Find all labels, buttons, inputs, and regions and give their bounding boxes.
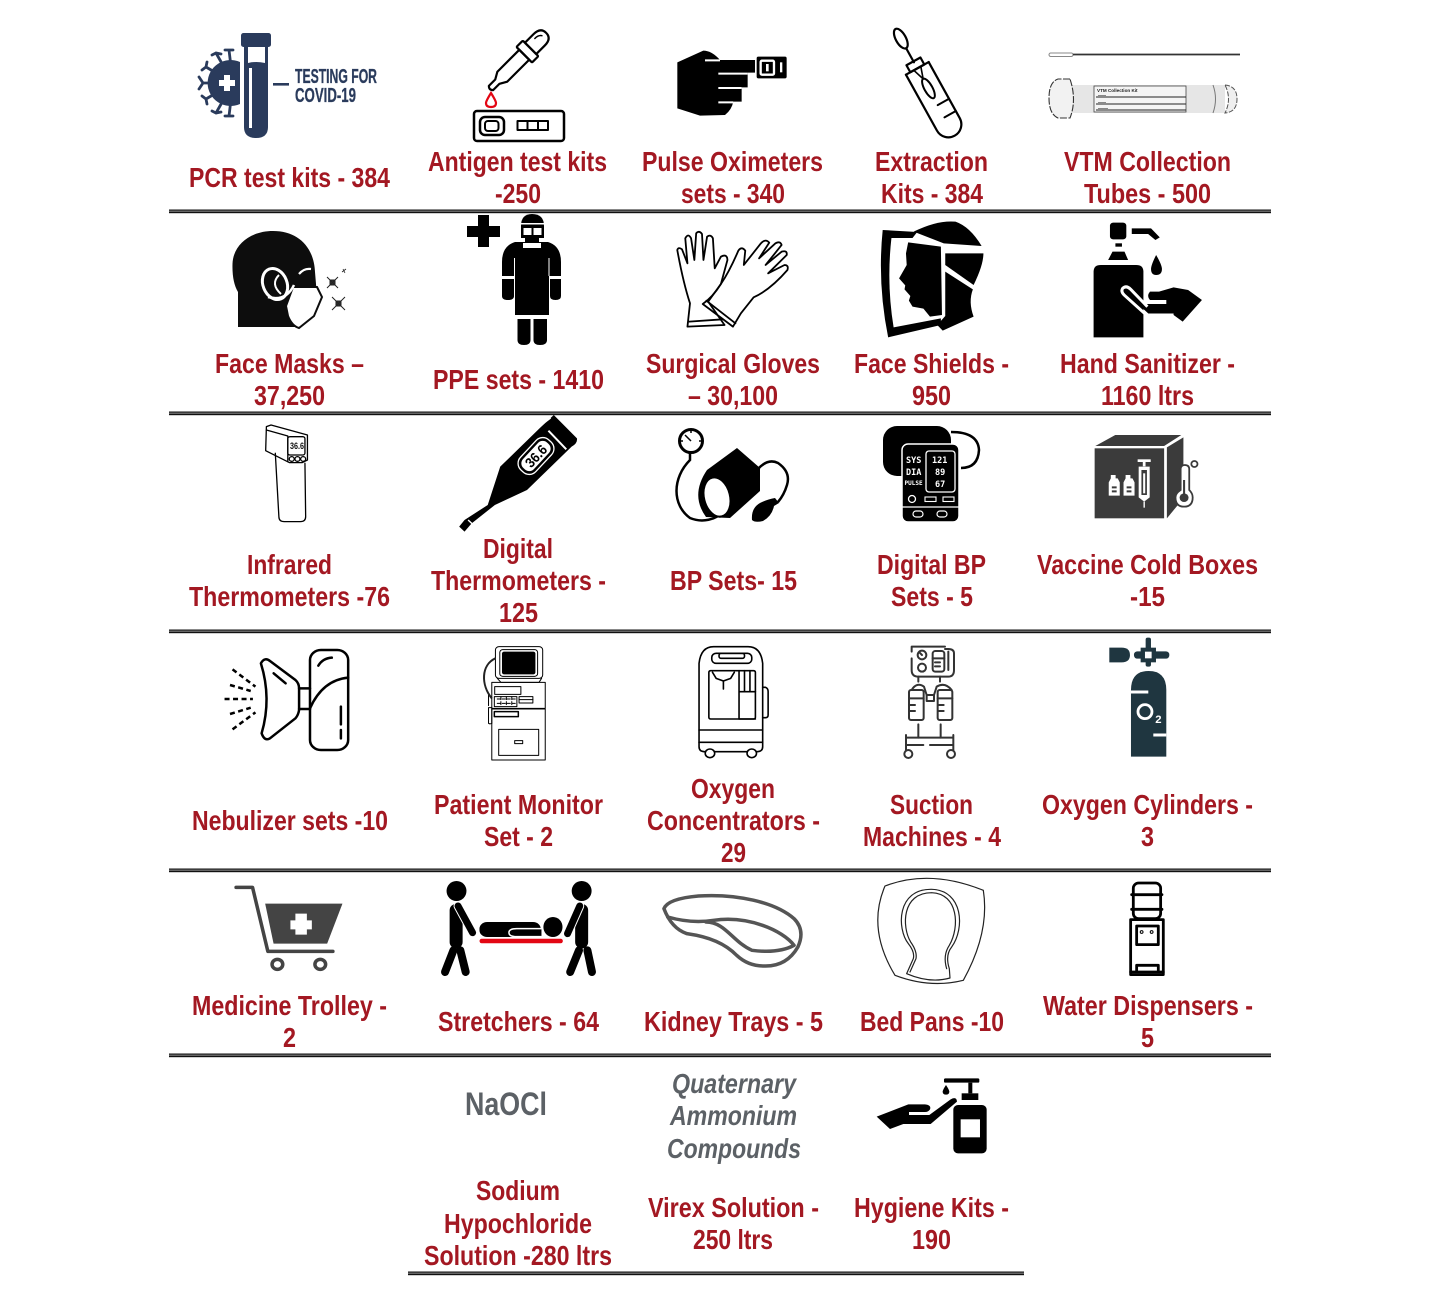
- label: Medicine Trolley: 2: [283, 1022, 296, 1053]
- label: Digital Thermometers: Digital: [483, 533, 553, 564]
- icon: digital BP monitor: DIA: [906, 468, 921, 478]
- icon: dropper and antigen cassette: [474, 25, 564, 141]
- label: Antigen test kits: [428, 146, 607, 209]
- label: Digital BP Sets: [877, 549, 986, 612]
- icon: VTM tube and swab: [1049, 53, 1240, 118]
- item: Oxygen Concentrators: [647, 647, 820, 868]
- icon: digital BP monitor: [883, 426, 979, 522]
- label: Oxygen Cylinders: Oxygen Cylinders -: [1042, 789, 1253, 820]
- label: Virex Solution: Virex Solution -: [648, 1192, 819, 1223]
- item: Oxygen Cylinders: [1042, 638, 1253, 852]
- item: Bed Pans: [860, 878, 1004, 1037]
- label: Pulse Oximeters: Pulse Oximeters: [642, 146, 823, 177]
- icon: kidney tray: [664, 896, 801, 966]
- label: Hand Sanitizer: 1160 ltrs: [1101, 380, 1194, 411]
- label: Oxygen Concentrators: [647, 773, 820, 868]
- label: Medicine Trolley: Medicine Trolley -: [192, 990, 387, 1021]
- label: PPE sets: PPE sets - 1410: [433, 364, 604, 395]
- label: Infrared Thermometers: Infrared: [247, 549, 332, 580]
- label: Patient Monitor Set: Set - 2: [484, 821, 553, 852]
- icon: swab in tube: [884, 23, 966, 142]
- label: Digital BP Sets: Digital BP: [877, 549, 986, 580]
- label: Kidney Trays: Kidney Trays - 5: [644, 1006, 823, 1037]
- label: Sodium Hypochloride Solution: [424, 1175, 612, 1271]
- item: PCR test kits: [189, 33, 391, 193]
- item: Face Masks: [215, 231, 364, 411]
- item: Pulse Oximeters: [642, 51, 823, 209]
- item: Nebulizer sets: [192, 650, 388, 836]
- icon: Quaternary Ammonium Compounds text: Quaternary: [672, 1068, 797, 1099]
- icon: finger in pulse oximeter: [677, 51, 787, 116]
- label: Suction Machines: Suction: [890, 789, 973, 820]
- label: Virex Solution: [648, 1192, 819, 1255]
- icon: PCR test tube and virus: COVID-19: [295, 85, 356, 107]
- label: Suction Machines: [863, 789, 1002, 852]
- icon: digital BP monitor: 89: [935, 468, 945, 478]
- label: Infrared Thermometers: [189, 549, 390, 612]
- icon: digital BP monitor: SYS: [906, 456, 921, 466]
- label: Patient Monitor Set: [434, 789, 603, 852]
- item: Sodium Hypochloride Solution: [424, 1086, 612, 1271]
- label: Patient Monitor Set: Patient Monitor: [434, 789, 603, 820]
- item: Antigen test kits: [428, 25, 607, 209]
- icon: suction machine: [904, 647, 955, 758]
- item: Face Shields: [854, 221, 1009, 411]
- icon: person in PPE with plus: [467, 214, 561, 345]
- label: Water Dispensers: 5: [1141, 1022, 1154, 1053]
- label: Face Shields: 950: [912, 380, 951, 411]
- icon: head with face mask: [232, 231, 346, 328]
- icon: stretcher carriers: [445, 881, 592, 972]
- item: Suction Machines: [863, 647, 1002, 852]
- label: Hygiene Kits: Hygiene Kits -: [854, 1192, 1009, 1223]
- item: PPE sets: [433, 214, 604, 395]
- icon: Quaternary Ammonium Compounds text: Compounds: [667, 1133, 801, 1164]
- label: Antigen test kits: -250: [495, 178, 541, 209]
- label: Surgical Gloves: [646, 348, 820, 411]
- label: Digital BP Sets: Sets - 5: [891, 581, 973, 612]
- label: Oxygen Concentrators: Concentrators -: [647, 805, 820, 836]
- label: Face Masks: 37,250: [254, 380, 325, 411]
- label: Stretchers: Stretchers - 64: [438, 1006, 600, 1037]
- item: Hygiene Kits: [854, 1078, 1009, 1255]
- icon: hand under soap dispenser: [877, 1078, 987, 1153]
- icon: PCR test tube and virus: TESTING FOR: [295, 66, 377, 88]
- item: Vaccine Cold Boxes: [1037, 435, 1258, 612]
- label: Water Dispensers: [1043, 990, 1253, 1053]
- label: Oxygen Cylinders: [1042, 789, 1253, 852]
- label: Sodium Hypochloride Solution: Sodium: [476, 1175, 560, 1206]
- icon: digital BP monitor: 121: [932, 456, 947, 466]
- item: Water Dispensers: [1043, 883, 1253, 1053]
- label: Vaccine Cold Boxes: Vaccine Cold Boxes: [1037, 549, 1258, 580]
- label: Hand Sanitizer: [1060, 348, 1235, 411]
- label: Extraction Kits: Extraction: [875, 146, 988, 177]
- label: Virex Solution: 250 ltrs: [693, 1224, 773, 1255]
- icon: oxygen cylinder: 2: [1155, 714, 1162, 726]
- label: Water Dispensers: Water Dispensers -: [1043, 990, 1253, 1021]
- icon: digital BP monitor: 67: [935, 480, 945, 490]
- label: Hand Sanitizer: Hand Sanitizer -: [1060, 348, 1235, 379]
- label: Pulse Oximeters: sets - 340: [681, 178, 785, 209]
- item: Extraction Kits: [875, 23, 988, 209]
- icon: water dispenser: [1131, 883, 1163, 975]
- icon: infrared thermometer gun: 36.6: [290, 441, 304, 451]
- label: Oxygen Cylinders: 3: [1141, 821, 1154, 852]
- label: Surgical Gloves: – 30,100: [688, 380, 778, 411]
- icon: NaOCl formula: NaOCl: [465, 1086, 547, 1122]
- label: Infrared Thermometers: Thermometers -76: [189, 581, 390, 612]
- label: Sodium Hypochloride Solution: Solution -280 ltrs: [424, 1240, 612, 1271]
- icon: medicine trolley: [236, 887, 342, 969]
- icon: bed pan: [878, 878, 985, 984]
- label: Vaccine Cold Boxes: [1037, 549, 1258, 612]
- icon: oxygen concentrator: [699, 647, 768, 758]
- label: Hygiene Kits: 190: [912, 1224, 951, 1255]
- label: Face Shields: Face Shields -: [854, 348, 1009, 379]
- label: Digital Thermometers: [431, 533, 606, 628]
- label: Hygiene Kits: [854, 1192, 1009, 1255]
- icon: Quaternary Ammonium Compounds text: [667, 1068, 801, 1164]
- label: Sodium Hypochloride Solution: Hypochloride: [444, 1208, 592, 1239]
- icon: pair of gloves: [677, 232, 788, 327]
- item: Infrared Thermometers: [189, 425, 390, 612]
- label: Pulse Oximeters: [642, 146, 823, 209]
- icon: digital thermometer: 36.6: [522, 441, 551, 471]
- item: VTM Collection Tubes: [1049, 53, 1240, 209]
- label: BP Sets: BP Sets- 15: [670, 565, 797, 596]
- label: Nebulizer sets: Nebulizer sets -10: [192, 805, 388, 836]
- label: Extraction Kits: Kits - 384: [881, 178, 984, 209]
- label: Medicine Trolley: [192, 990, 387, 1053]
- icon: patient monitor: [484, 647, 545, 760]
- icon: VTM tube and swab: VTM Collection Kit: [1097, 88, 1138, 93]
- label: Bed Pans: Bed Pans -10: [860, 1006, 1004, 1037]
- label: VTM Collection Tubes: Tubes - 500: [1084, 178, 1211, 209]
- item: Digital Thermometers: [431, 415, 606, 628]
- label: Suction Machines: Machines - 4: [863, 821, 1002, 852]
- label: Face Masks: [215, 348, 364, 411]
- icon: Quaternary Ammonium Compounds text: Ammonium: [669, 1100, 797, 1131]
- label: Oxygen Concentrators: Oxygen: [691, 773, 775, 804]
- item: Stretchers: [438, 881, 600, 1037]
- icon: sanitizer bottle and hand: [1094, 223, 1202, 337]
- label: Face Shields: [854, 348, 1009, 411]
- label: PCR test kits: PCR test kits - 384: [189, 162, 391, 193]
- icon: digital thermometer: [459, 415, 577, 532]
- item: Kidney Trays: [644, 896, 823, 1037]
- item: Hand Sanitizer: [1060, 223, 1235, 411]
- item: Surgical Gloves: [646, 232, 820, 411]
- item: Virex Solution: [648, 1068, 819, 1255]
- label: VTM Collection Tubes: [1064, 146, 1231, 209]
- icon: infrared thermometer gun: [266, 425, 307, 522]
- item: Medicine Trolley: [192, 887, 387, 1053]
- label: Surgical Gloves: Surgical Gloves: [646, 348, 820, 379]
- label: Digital Thermometers: 125: [499, 597, 538, 628]
- item: Digital BP Sets: [877, 426, 986, 612]
- label: Oxygen Concentrators: 29: [721, 837, 746, 868]
- icon: face shield: [881, 221, 983, 337]
- icon: sphygmomanometer: [676, 430, 788, 522]
- icon: nebulizer mask: [225, 650, 348, 750]
- label: Digital Thermometers: Thermometers -: [431, 565, 606, 596]
- item: BP Sets: [670, 430, 797, 596]
- label: Extraction Kits: [875, 146, 988, 209]
- item: Patient Monitor Set: [434, 647, 603, 852]
- icon: digital BP monitor: PULSE: [904, 480, 923, 487]
- label: Antigen test kits: Antigen test kits: [428, 146, 607, 177]
- icon: PCR test tube and virus: [199, 33, 377, 138]
- label: Vaccine Cold Boxes: -15: [1130, 581, 1165, 612]
- label: VTM Collection Tubes: VTM Collection: [1064, 146, 1231, 177]
- icon: oxygen cylinder: [1109, 638, 1169, 757]
- label: Face Masks: Face Masks –: [215, 348, 364, 379]
- icon: vaccine cold box: [1095, 435, 1197, 518]
